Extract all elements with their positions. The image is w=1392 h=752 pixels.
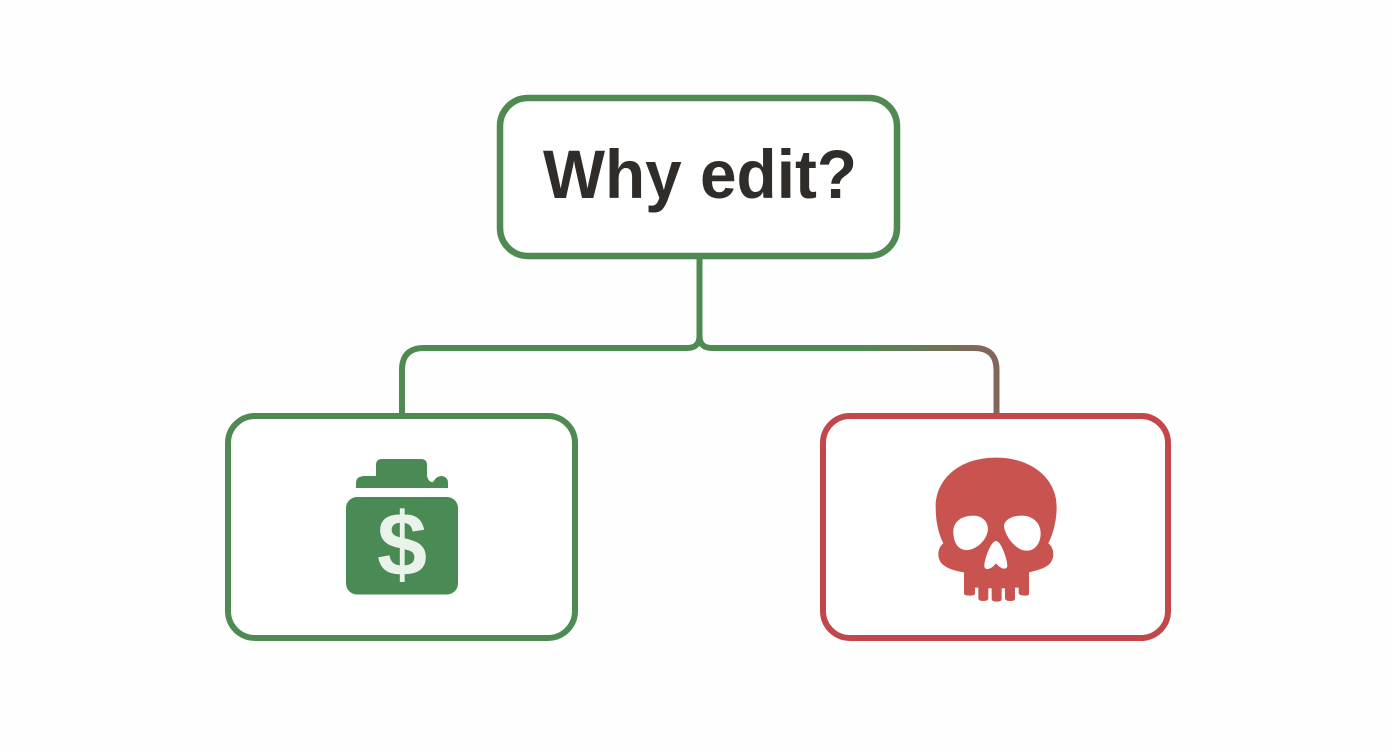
connector: right branch (700, 258, 996, 414)
panel: skull (823, 416, 1168, 638)
icon: money bag with dollar sign (346, 459, 458, 596)
panel: why edit heading box (500, 98, 897, 256)
heading: Why edit?: Why edit? (543, 136, 857, 213)
connector: left branch (402, 258, 700, 414)
icon: money bag with dollar sign: $ (377, 496, 427, 596)
panel: money (228, 416, 575, 638)
icon: skull (936, 458, 1057, 602)
